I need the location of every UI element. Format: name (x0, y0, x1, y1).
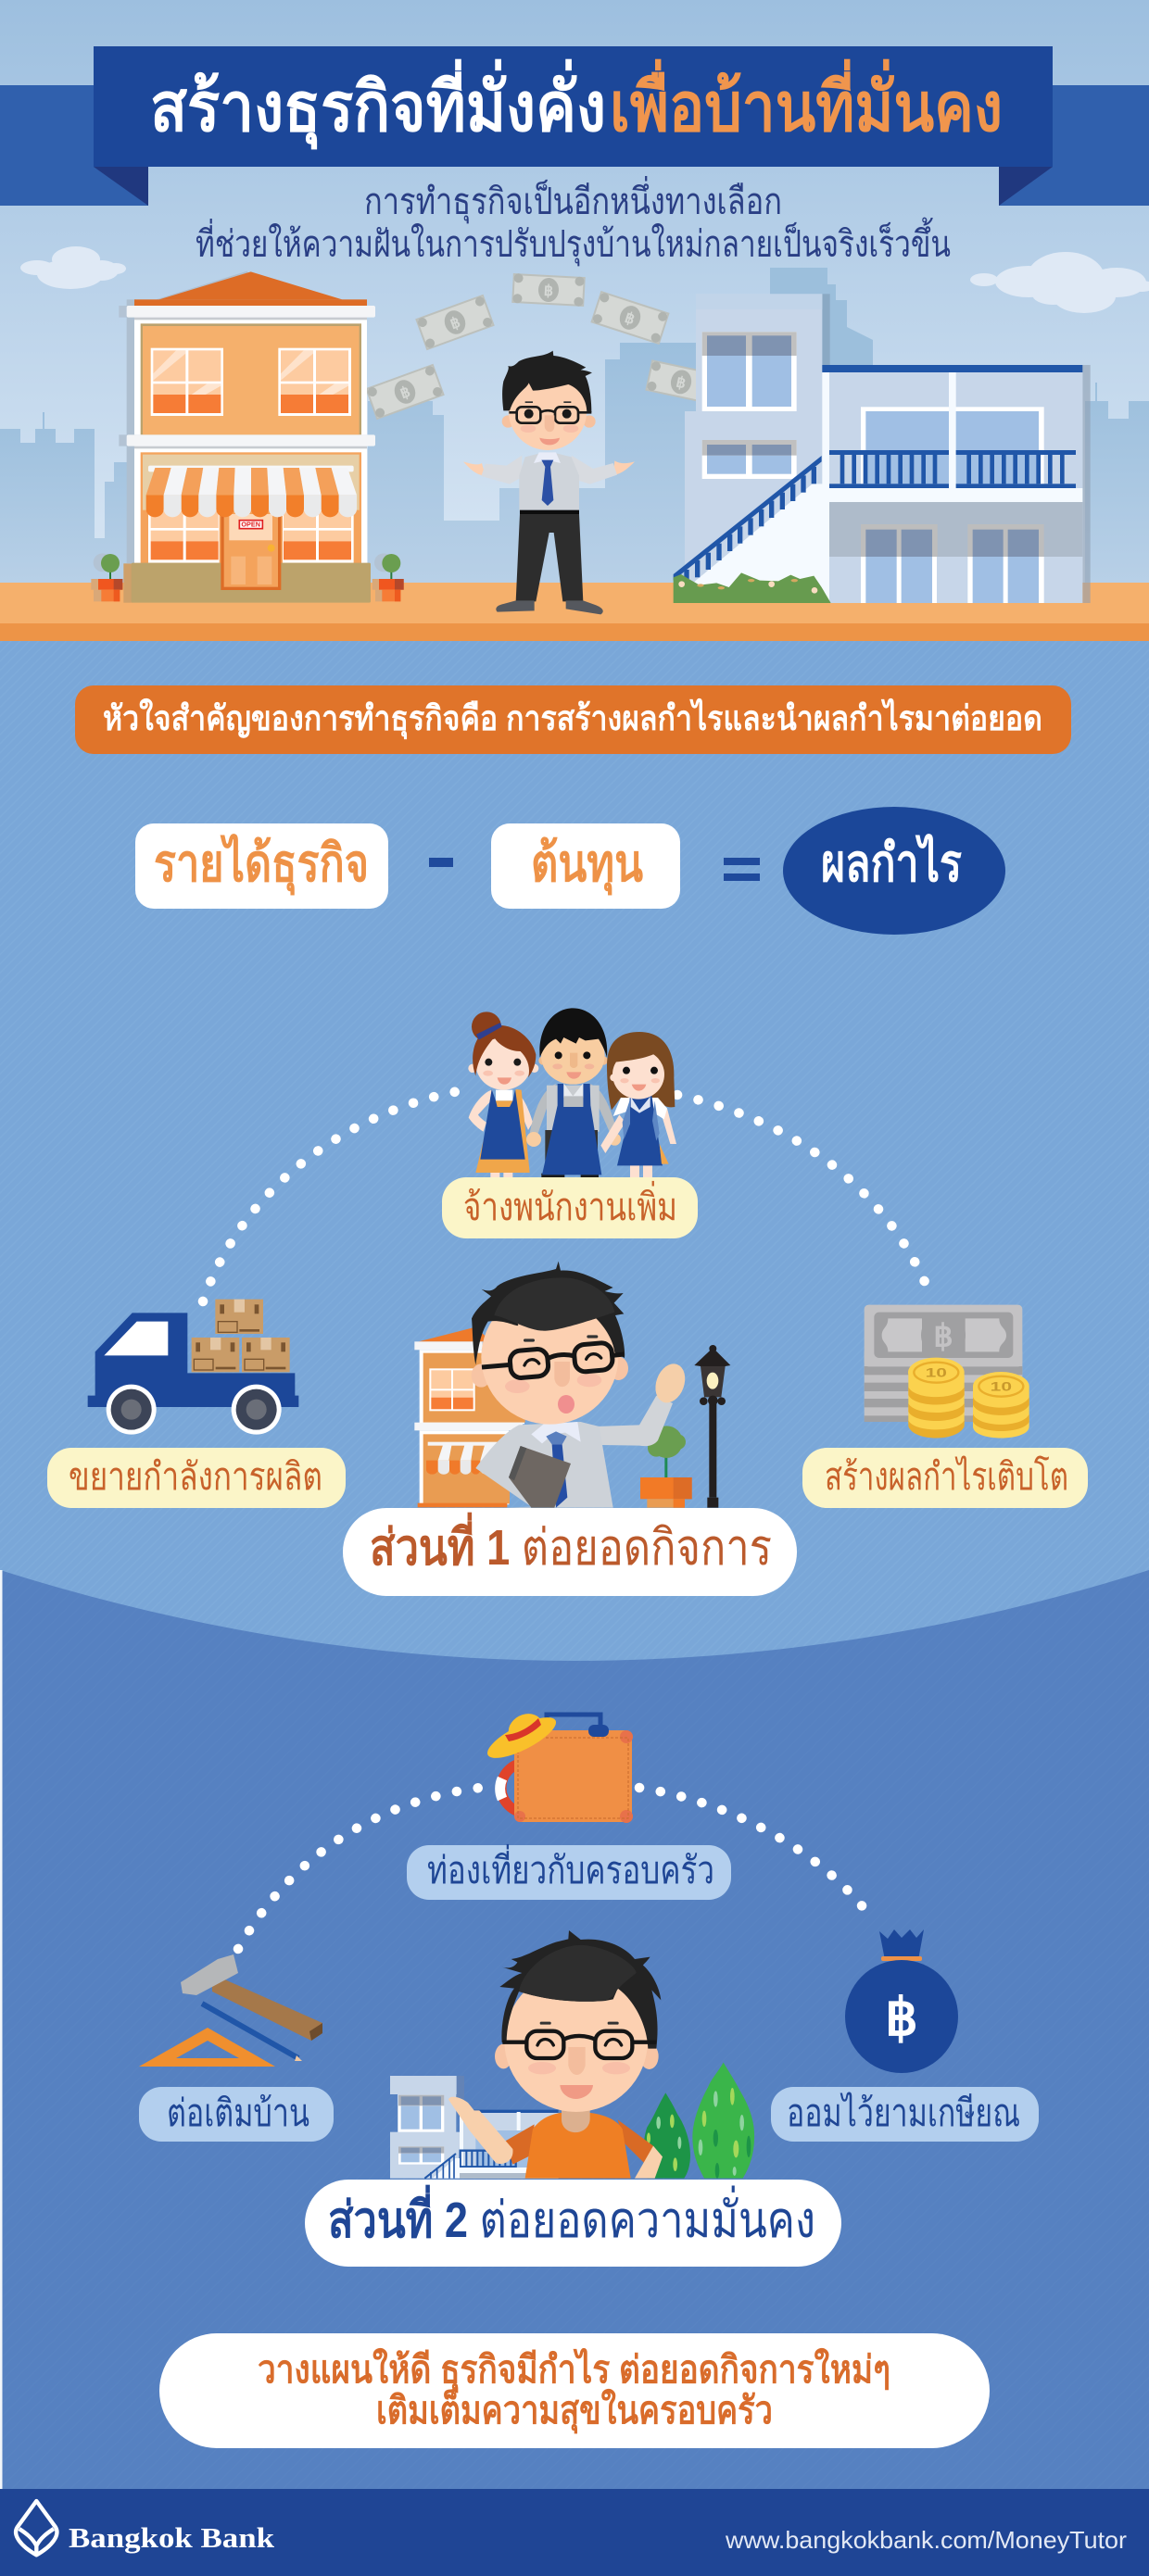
boxes (192, 1300, 290, 1372)
banknotes and coins: ฿ (933, 1319, 953, 1353)
money bill 3: ฿ (543, 283, 553, 299)
head (502, 415, 514, 428)
ground (0, 583, 1149, 642)
left plant (91, 553, 122, 601)
trees (644, 2063, 754, 2179)
truck with boxes (88, 1300, 298, 1435)
body (448, 2097, 663, 2179)
ground floor right door (967, 524, 1044, 603)
tower lower window (702, 440, 797, 479)
glasses and face (502, 2022, 656, 2099)
savings bag (845, 1929, 958, 2073)
label: hire more staff: จ้างพนักงานเพิ่ม (463, 1181, 677, 1228)
banknotes and coins (865, 1305, 1029, 1438)
blue body section two (0, 1570, 1149, 2492)
woman right (600, 1032, 676, 1178)
money bill 2 (416, 295, 494, 349)
plant and pot (640, 1426, 692, 1508)
closing message: เติมเต็มความสุขในครอบครัว (376, 2387, 773, 2434)
label: hire more staff (442, 1177, 698, 1238)
heart of business banner (75, 685, 1071, 754)
label: family travel (407, 1844, 731, 1900)
pill: part 1 (343, 1508, 797, 1596)
label: retirement savings: ออมไว้ยามเกษียณ (787, 2092, 1020, 2134)
cloud right (970, 252, 1149, 313)
label: grow profit (802, 1448, 1088, 1508)
money bill 4 (592, 292, 668, 344)
torso (519, 452, 579, 510)
head (472, 1262, 628, 1425)
money bill 3 (512, 273, 585, 307)
label: grow profit: สร้างผลกำไรเติบโต (825, 1455, 1068, 1498)
shop base (132, 563, 371, 603)
formula: equals (724, 858, 760, 881)
street lamp (694, 1345, 730, 1508)
body (475, 1360, 690, 1508)
label: expand production (47, 1448, 346, 1508)
woman left (468, 1012, 538, 1178)
suitcase with hat and life ring (483, 1708, 633, 1823)
awning (146, 466, 357, 517)
lower right window (283, 509, 354, 563)
staff illustration (468, 1008, 676, 1178)
sky background (0, 0, 1149, 584)
title ribbon (0, 46, 1149, 206)
label: family travel: ท่องเที่ยวกับครอบครัว (427, 1844, 714, 1891)
formula: profit: ผลกำไร (821, 833, 962, 892)
dotted arc right (677, 1095, 928, 1290)
upper left window (151, 348, 223, 416)
savings bag: ฿ (885, 1988, 918, 2046)
staircase (674, 456, 829, 603)
right block (822, 365, 1091, 603)
money bill 1 (366, 365, 444, 419)
closing message (159, 2333, 990, 2448)
formula: cost: ต้นทุน (531, 834, 643, 896)
label: home extension: ต่อเติมบ้าน (167, 2092, 309, 2134)
small shop (414, 1327, 525, 1507)
money bill 1: ฿ (398, 384, 412, 402)
formula: profit (783, 807, 1005, 935)
trousers (516, 514, 583, 601)
tools: hammer pencil set square (139, 1954, 322, 2067)
left edge sliver (0, 1570, 2, 2489)
glasses and face (482, 1335, 624, 1414)
footer (0, 2489, 1149, 2576)
title text white: สร้างธุรกิจที่มั่งคั่ง (150, 58, 606, 150)
businessman standing (463, 351, 635, 614)
title text orange: เพื่อบ้านที่มั่นคง (610, 58, 1003, 145)
label: home extension (139, 2087, 334, 2142)
background skyline (0, 268, 1149, 584)
lower left window (148, 509, 220, 563)
bangkok bank logo (16, 2501, 57, 2555)
closing message: วางแผนให้ดี ธุรกิจมีกำไร ต่อยอดกิจการใหม่ๆ (258, 2347, 890, 2394)
coin stack large (908, 1358, 965, 1438)
tower upper window (702, 332, 797, 411)
shoes (496, 600, 603, 614)
bank name: Bangkok Bank (69, 2521, 275, 2554)
money bill 5: ฿ (675, 374, 688, 392)
coin stack small: 10 (991, 1379, 1012, 1394)
upper right window (278, 348, 351, 416)
coin stack large: 10 (926, 1365, 947, 1380)
pill: part 1: ส่วนที่ 1 ต่อยอดกิจการ (370, 1512, 772, 1576)
money bill 4: ฿ (623, 310, 637, 328)
mini house (390, 2076, 559, 2179)
subtitle line two: ที่ช่วยให้ความฝันในการปรับปรุงบ้านใหม่กลายเป็นจริงเร็วขึ้น (196, 217, 951, 267)
man centre (526, 1008, 621, 1177)
money bill 5 (645, 359, 696, 401)
dotted arc left (203, 1088, 474, 1301)
arms (463, 456, 635, 484)
glasses (509, 407, 591, 423)
shop door (221, 514, 281, 590)
formula: business income (135, 823, 388, 909)
pill: part 2: ส่วนที่ 2 ต่อยอดความมั่นคง (328, 2184, 815, 2248)
label: expand production: ขยายกำลังการผลิต (69, 1455, 322, 1498)
dotted arc right section two (639, 1788, 874, 1921)
happy man with home illustration (390, 1930, 754, 2179)
formula: minus (429, 858, 453, 867)
house building (674, 294, 1091, 603)
pill: part 2 (305, 2180, 841, 2267)
subtitle line one: การทำธุรกิจเป็นอีกหนึ่งทางเลือก (364, 176, 782, 224)
money bill 2: ฿ (448, 315, 462, 333)
label: retirement savings (771, 2087, 1039, 2142)
dotted arc left section two (238, 1788, 480, 1949)
cloud left (20, 246, 126, 289)
head (495, 1930, 661, 2112)
ground floor left door (861, 524, 938, 603)
formula: cost (491, 823, 680, 909)
shrub (674, 572, 831, 603)
owner with shop illustration (414, 1262, 730, 1508)
website url: www.bangkokbank.com/MoneyTutor (725, 2526, 1127, 2554)
formula: business income: รายได้ธุรกิจ (154, 833, 369, 896)
balcony railing (829, 450, 1076, 488)
shop building (91, 271, 404, 603)
shop door: OPEN (241, 521, 260, 529)
right plant (372, 553, 404, 601)
coin stack small (973, 1372, 1029, 1438)
blue body section one (0, 641, 1149, 1660)
